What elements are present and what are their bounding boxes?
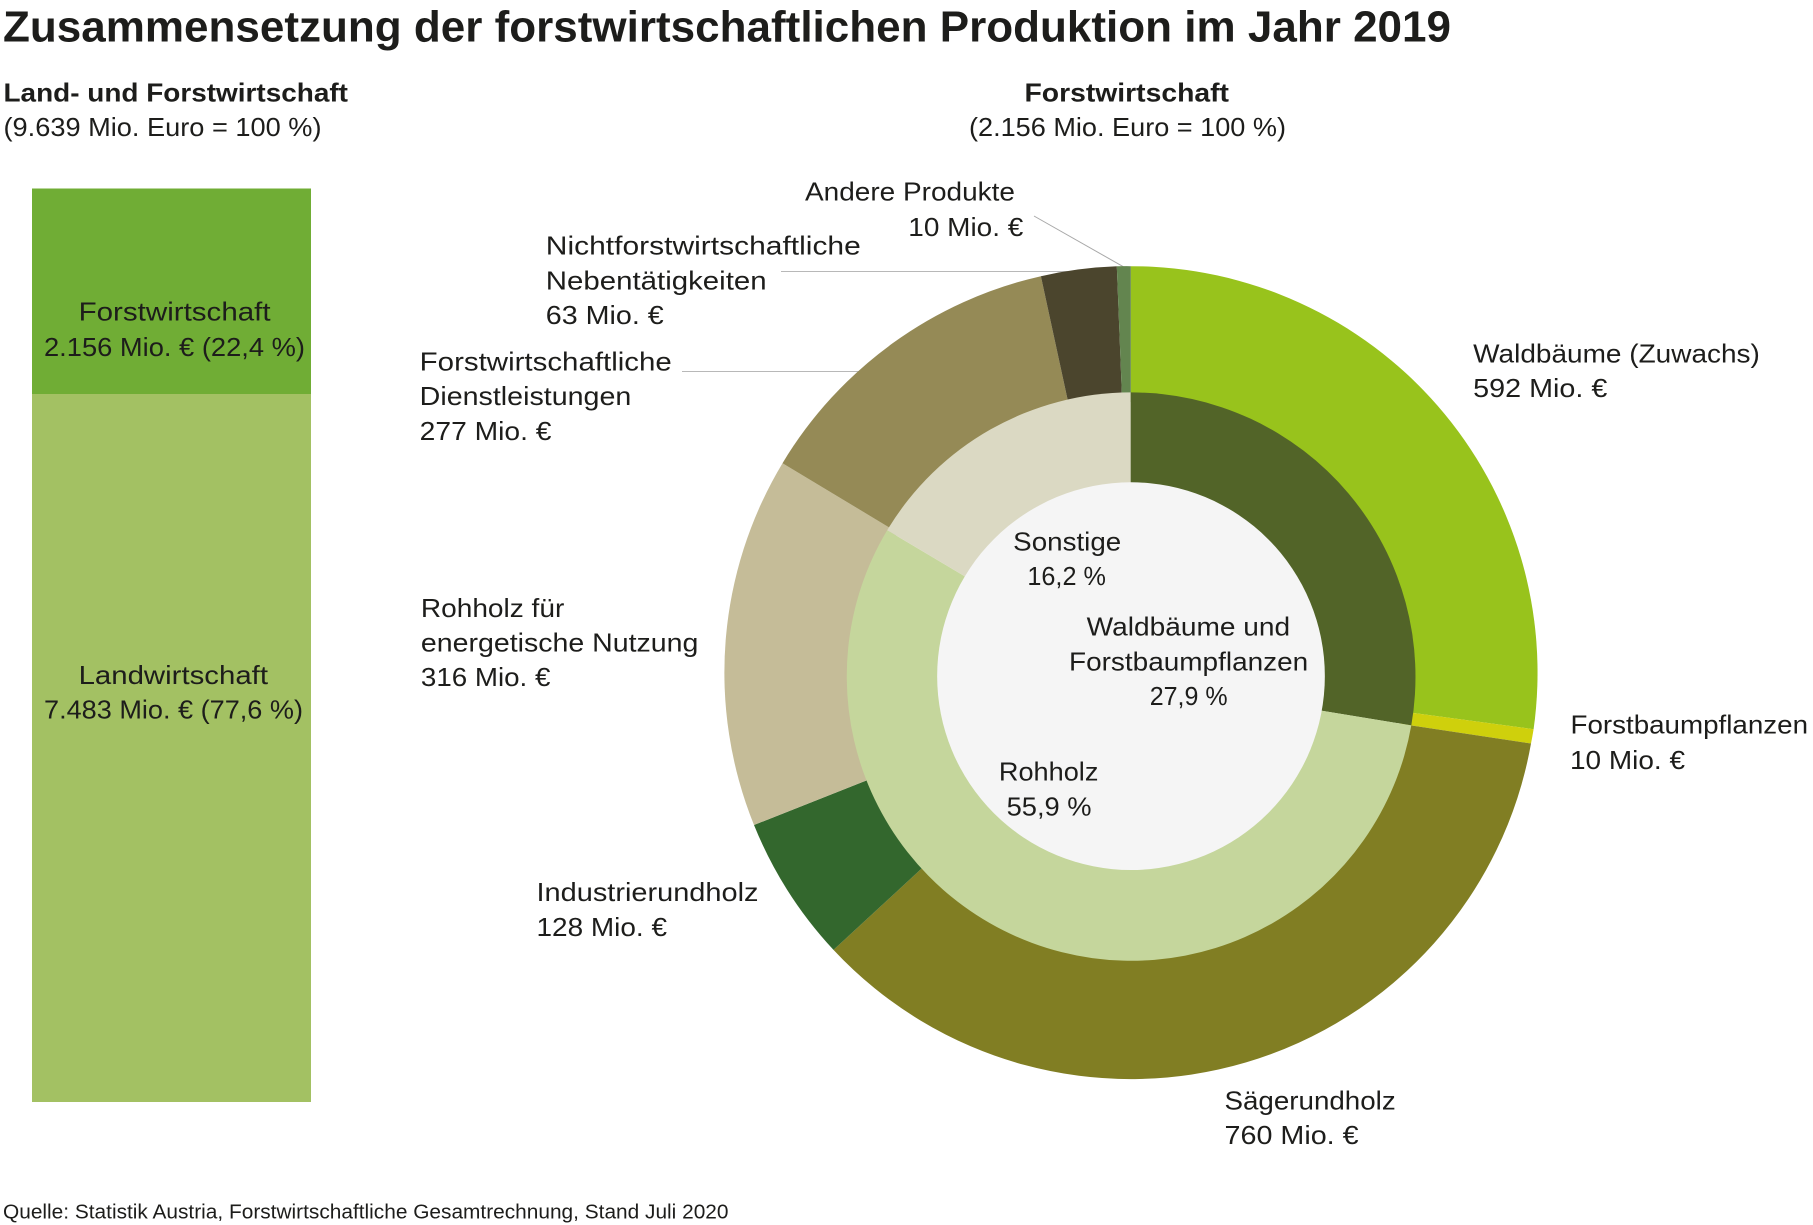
- label: Forstbaumpflanzen: Forstbaumpflanzen: [1570, 710, 1808, 740]
- heading: Land- und Forstwirtschaft: Land- und Forstwirtschaft: [4, 78, 348, 108]
- label: Andere Produkte: Andere Produkte: [805, 177, 1015, 207]
- label: Industrierundholz: 128 Mio. €: [536, 912, 668, 942]
- segment: Industrierundholz: [754, 777, 928, 950]
- title: Zusammensetzung der forstwirtschaftlichen Produktion im Jahr 2019: [3, 3, 1451, 52]
- segment: Sonstige: [887, 392, 1131, 580]
- source note: Quelle: Statistik Austria, Forstwirtschaftliche Gesamtrechnung, Stand Juli 2020: [3, 1202, 728, 1224]
- label: Nichtforstwirtschaftliche Nebentätigkeiten: Nebentätigkeiten: [546, 265, 767, 295]
- centre label: Sonstige: 16,2 %: [1027, 561, 1106, 591]
- segment: Waldbäume (Zuwachs): [1131, 266, 1538, 729]
- label: Waldbäume (Zuwachs): [1473, 338, 1760, 403]
- leader line: Andere Produkte: [1034, 216, 1123, 267]
- centre label: Waldbäume und Forstbaumpflanzen: 27,9 %: [1150, 681, 1228, 711]
- segment: Rohholz: [847, 530, 1411, 961]
- heading: Forstwirtschaft: [969, 78, 1286, 142]
- label: Nichtforstwirtschaftliche Nebentätigkeiten: Nichtforstwirtschaftliche: [546, 230, 861, 260]
- bar segment: Landwirtschaft: Landwirtschaft: [79, 660, 269, 690]
- label: Industrierundholz: [536, 877, 758, 942]
- centre label: Rohholz: [999, 756, 1098, 822]
- segment: Waldbäume und Forstbaumpflanzen: [1131, 392, 1415, 725]
- label: Industrierundholz: Industrierundholz: [536, 877, 758, 907]
- label: Forstbaumpflanzen: 10 Mio. €: [1570, 745, 1686, 775]
- label: Andere Produkte: 10 Mio. €: [908, 212, 1024, 242]
- outer ring: [724, 266, 1538, 1079]
- bar segment: Forstwirtschaft: Forstwirtschaft: [79, 297, 271, 327]
- centre label: Waldbäume und Forstbaumpflanzen: Forstbaumpflanzen: [1069, 646, 1308, 676]
- label: Forstbaumpflanzen: [1570, 710, 1808, 775]
- bar segment: Landwirtschaft: [32, 394, 311, 1102]
- segment: Forstwirtschaftliche Dienstleistungen: [782, 276, 1070, 532]
- heading: Land- und Forstwirtschaft: [4, 78, 348, 142]
- centre label: Rohholz: 55,9 %: [1007, 792, 1092, 822]
- label: Rohholz für energetische Nutzung: Rohholz für: [421, 593, 565, 623]
- label: Waldbäume (Zuwachs): Waldbäume (Zuwachs): [1473, 338, 1760, 368]
- bar segment: Forstwirtschaft: [32, 188, 311, 394]
- segment: Sägerundholz: [834, 724, 1531, 1079]
- label: Sägerundholz: 760 Mio. €: [1224, 1120, 1359, 1150]
- leader line: Nichtforstwirtschaftliche Nebentätigkeiten: [781, 270, 1072, 272]
- centre label: Waldbäume und Forstbaumpflanzen: [1069, 612, 1308, 711]
- label: Forstwirtschaftliche Dienstleistungen: 277 Mio. €: [420, 416, 552, 446]
- donut centre: [937, 482, 1325, 870]
- label: Forstwirtschaftliche Dienstleistungen: Forstwirtschaftliche: [420, 346, 672, 376]
- label: Sägerundholz: Sägerundholz: [1224, 1085, 1396, 1115]
- bar segment: Landwirtschaft: 7.483 Mio. € (77,6 %): [44, 694, 303, 724]
- label: Waldbäume (Zuwachs): 592 Mio. €: [1473, 373, 1608, 403]
- segment: Forstbaumpflanzen: [1401, 712, 1534, 744]
- stacked bar chart: [32, 188, 311, 1102]
- centre label: Waldbäume und Forstbaumpflanzen: Waldbäume und: [1087, 612, 1290, 642]
- inner ring: [847, 392, 1415, 961]
- segment: Nichtforstwirtschaftliche Nebentätigkeiten: [1041, 266, 1122, 409]
- label: Rohholz für energetische Nutzung: [421, 593, 698, 692]
- label: Andere Produkte: [805, 177, 1024, 242]
- centre label: Rohholz: Rohholz: [999, 756, 1098, 786]
- heading: Forstwirtschaft: (2.156 Mio. Euro = 100 %): [969, 112, 1286, 142]
- label: Forstwirtschaftliche Dienstleistungen: [420, 346, 672, 446]
- segment: Rohholz für energetische Nutzung: [724, 463, 897, 825]
- heading: Forstwirtschaft: Forstwirtschaft: [1024, 78, 1229, 108]
- label: Rohholz für energetische Nutzung: energetische Nutzung: [421, 627, 698, 657]
- label: Nichtforstwirtschaftliche Nebentätigkeiten: 63 Mio. €: [546, 300, 664, 330]
- segment: Andere Produkte: [1117, 266, 1131, 402]
- label: Nichtforstwirtschaftliche Nebentätigkeiten: [546, 230, 861, 330]
- centre label: Sonstige: Sonstige: [1013, 526, 1121, 556]
- bar segment: Forstwirtschaft: 2.156 Mio. € (22,4 %): [44, 332, 305, 362]
- label: Forstwirtschaftliche Dienstleistungen: Dienstleistungen: [420, 381, 631, 411]
- donut chart: [724, 266, 1538, 1079]
- label: Sägerundholz: [1224, 1085, 1396, 1150]
- centre label: Sonstige: [1013, 526, 1121, 591]
- heading: Land- und Forstwirtschaft: (9.639 Mio. Euro = 100 %): [4, 112, 322, 142]
- label: Rohholz für energetische Nutzung: 316 Mio. €: [421, 662, 551, 692]
- leader line: Forstwirtschaftliche Dienstleistungen: [682, 370, 861, 372]
